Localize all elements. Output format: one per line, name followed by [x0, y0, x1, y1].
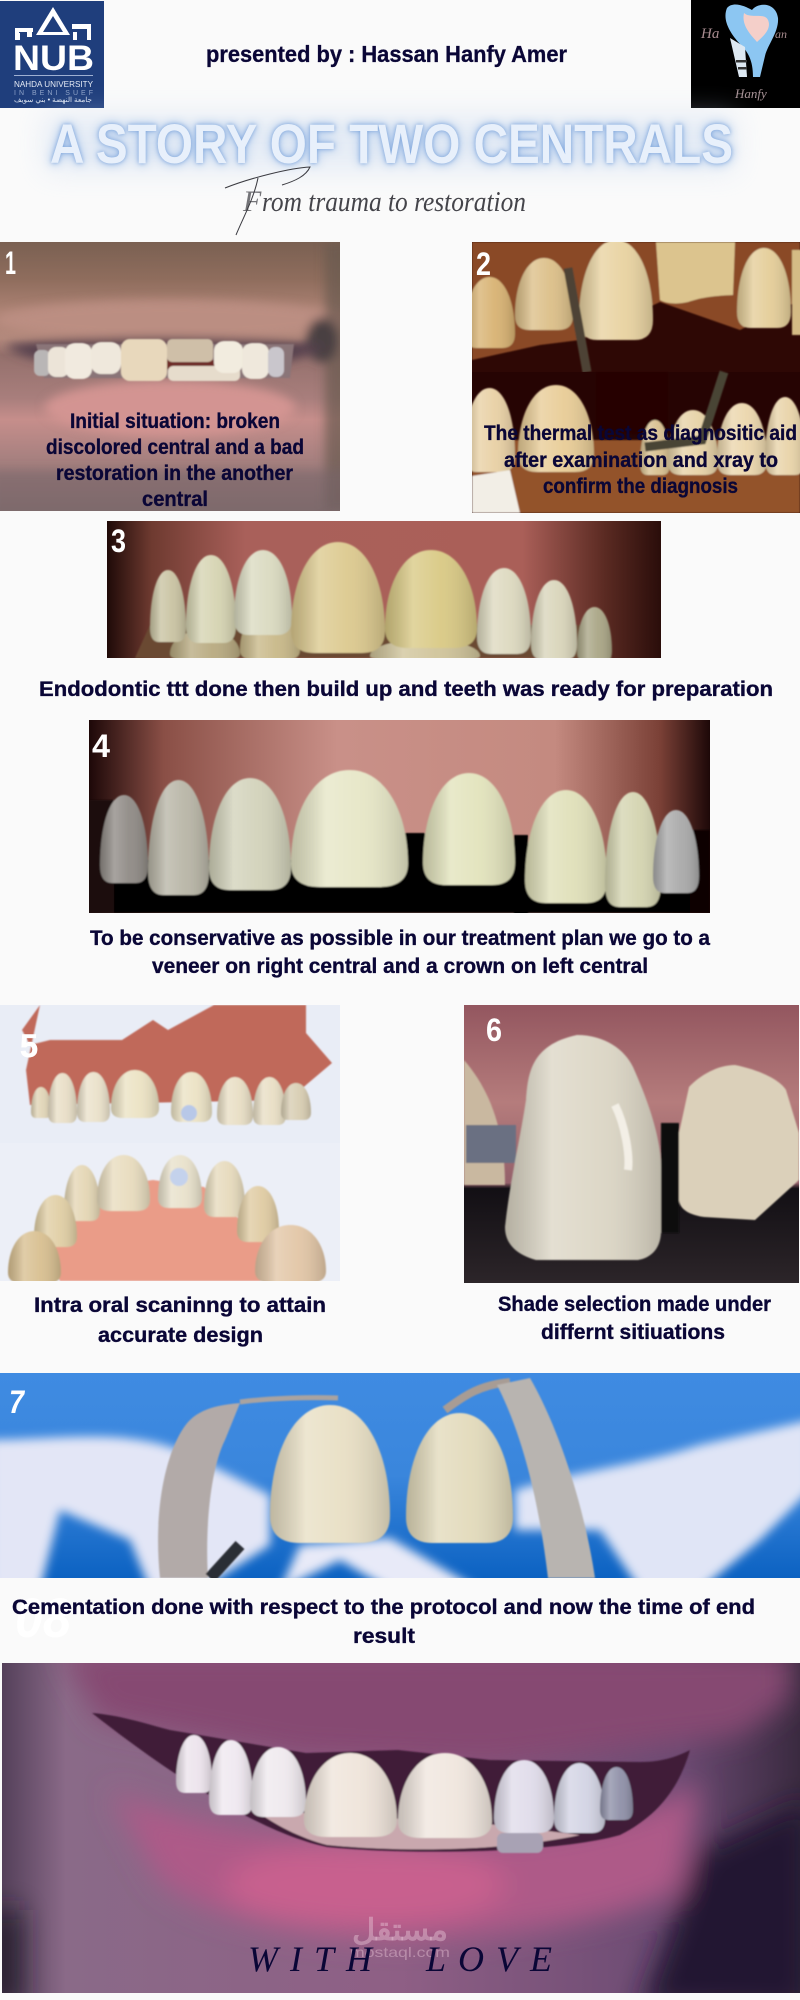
caption 6: Shade selection made under — [498, 1293, 771, 1316]
logo: tooth monogram — [691, 0, 800, 108]
panel 6: shade selection — [464, 1005, 799, 1283]
caption 1 — [46, 410, 304, 511]
presenter line: presented by : Hassan Hanfy Amer — [206, 41, 567, 67]
number 2: 2 — [476, 246, 491, 282]
caption 7: Cementation done with respect to the protocol and now the time of end — [12, 1596, 755, 1619]
caption 1: Initial situation: broken — [70, 410, 280, 433]
logo: Nahda University: IN BENI SUEF — [14, 90, 93, 97]
logo: Nahda University: NAHDA UNIVERSITY — [14, 79, 93, 89]
subtitle: rom trauma to restoration — [262, 186, 526, 218]
caption 1: discolored central and a bad — [46, 436, 304, 459]
subtitle — [225, 167, 526, 235]
watermark — [350, 1914, 450, 1960]
number 5: 5 — [20, 1028, 38, 1064]
panel 1: initial situation — [0, 242, 340, 511]
panel 8: end result smile — [2, 1663, 800, 1993]
caption 2: confirm the diagnosis — [543, 475, 738, 498]
panel 5: intra oral scanning — [0, 1005, 340, 1281]
caption 2 — [484, 422, 797, 498]
closing line: WITH LOVE — [248, 1939, 552, 1979]
caption 6 — [498, 1293, 771, 1344]
logo: tooth monogram: an — [775, 27, 787, 41]
caption 5 — [34, 1294, 326, 1347]
caption 5: accurate design — [98, 1324, 263, 1347]
number 1: 1 — [5, 245, 16, 281]
teeth — [34, 339, 294, 381]
watermark: مستقل — [352, 1914, 448, 1947]
watermark: mostaql.com — [350, 1944, 450, 1960]
panel 7: cementation — [0, 1373, 800, 1578]
panel 2: thermal test — [472, 242, 800, 513]
number 6: 6 — [486, 1012, 502, 1048]
number 4: 4 — [92, 728, 110, 764]
caption 1: restoration in the another — [56, 462, 293, 485]
caption 7 — [12, 1596, 755, 1648]
caption 4: To be conservative as possible in our treatment plan we go to a — [90, 927, 710, 950]
subtitle: F — [242, 185, 262, 218]
caption 2: after examination and xray to — [504, 449, 778, 472]
number 3: 3 — [111, 523, 126, 559]
caption 1: central — [142, 488, 208, 511]
logo: tooth monogram: Ha — [700, 26, 719, 42]
caption 4: veneer on right central and a crown on left central — [152, 955, 648, 978]
panel 3: endodontic treatment — [107, 521, 661, 658]
number 7: 7 — [9, 1384, 26, 1420]
logo: tooth monogram: Hanfy — [734, 86, 767, 101]
caption 4 — [90, 927, 710, 978]
caption 3: Endodontic ttt done then build up and teeth was ready for preparation — [39, 678, 773, 701]
caption 6: differnt sitiuations — [541, 1321, 725, 1344]
logo: Nahda University — [0, 1, 104, 108]
smile teeth — [92, 1713, 690, 1853]
caption 7: result — [353, 1625, 415, 1648]
caption 5: Intra oral scaninng to attain — [34, 1294, 326, 1317]
panel 4: veneer and crown plan — [89, 720, 710, 913]
logo: Nahda University: NUB — [13, 39, 94, 78]
faint step number 8: 08 — [15, 1586, 72, 1649]
logo: Nahda University: جامعة النهضة • بني سويف — [14, 96, 92, 104]
